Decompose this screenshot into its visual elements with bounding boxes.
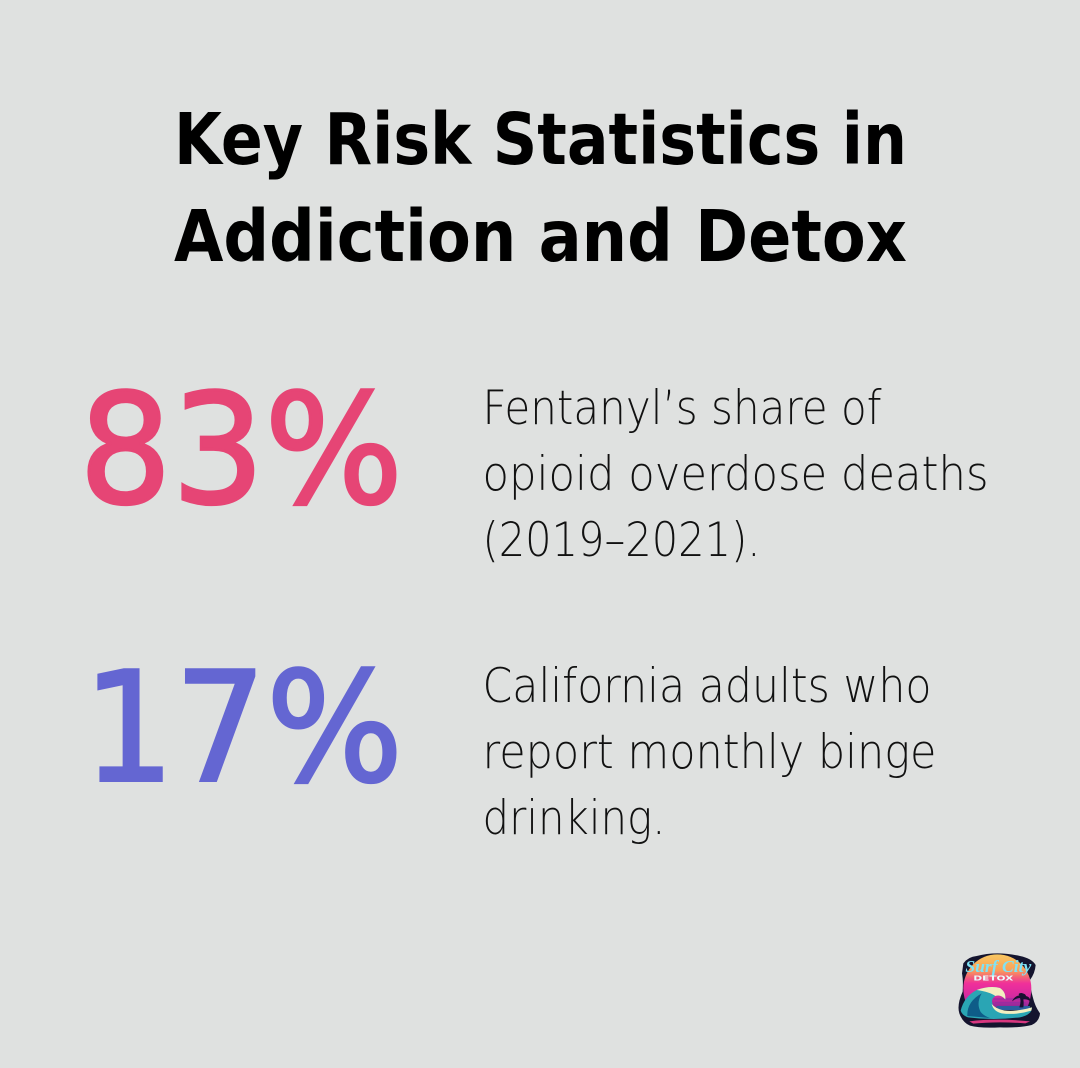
description: fentanyl share: opioid overdose deaths [482, 447, 988, 502]
title: Key Risk Statistics in [174, 98, 907, 181]
description: fentanyl share: (2019–2021). [482, 513, 760, 568]
title [174, 98, 907, 278]
description: fentanyl share: Fentanyl’s share of [482, 381, 882, 436]
description: California binge drinking: California adults who [482, 659, 932, 714]
palm tree silhouette [1012, 993, 1031, 1007]
description: California binge drinking: report monthly binge [482, 725, 936, 780]
title: Addiction and Detox [174, 195, 907, 278]
stat: 17%: 17% [83, 640, 403, 816]
stat: 83%: 83% [79, 362, 403, 538]
description: California binge drinking [482, 659, 936, 846]
description: fentanyl share [482, 381, 988, 568]
logo wordmark: Surf City [965, 957, 1032, 976]
description: California binge drinking: drinking. [482, 791, 666, 846]
logo subtitle: DETOX [973, 974, 1014, 983]
wave [961, 987, 1032, 1019]
icon: Surf City Detox logo [959, 953, 1040, 1028]
